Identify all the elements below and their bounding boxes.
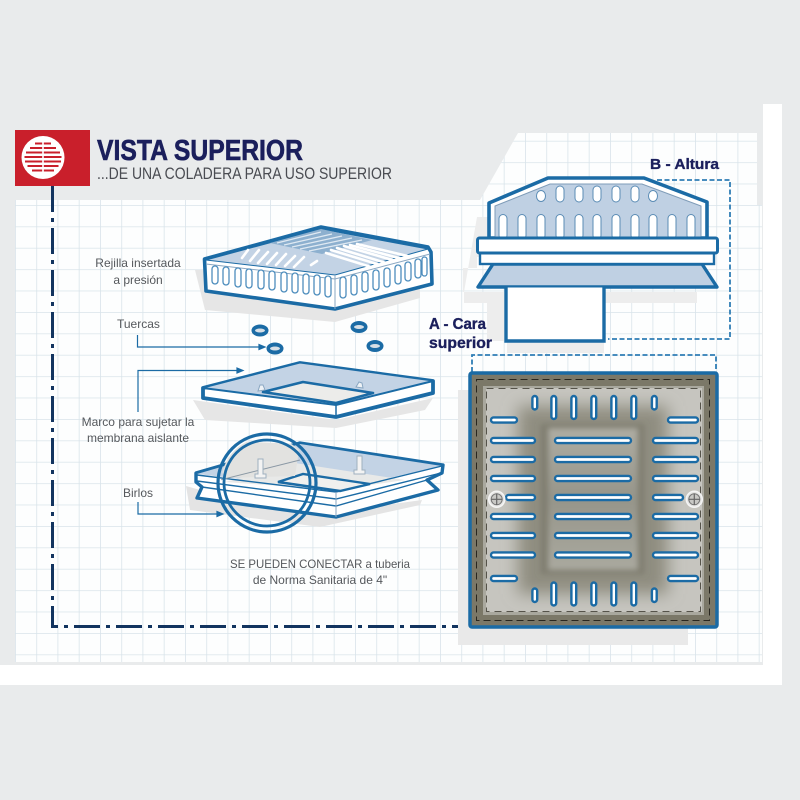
logo: red square with strainer bbox=[15, 130, 90, 186]
dash-dot connector line bbox=[52, 186, 470, 626]
label: A - Cara superior: superior bbox=[429, 335, 492, 352]
side view: height bbox=[463, 178, 718, 353]
label: marco: membrana aislante bbox=[87, 431, 189, 445]
title: VISTA SUPERIOR bbox=[97, 135, 303, 167]
connection note: SE PUEDEN CONECTAR a tuberia bbox=[230, 557, 410, 571]
dashed dimension: height bbox=[608, 180, 730, 339]
label: B - Altura: B - Altura bbox=[650, 156, 720, 173]
exploded part: base with magnified circle bbox=[186, 434, 443, 532]
label: tuercas: Tuercas bbox=[117, 317, 160, 331]
label: birlos: Birlos bbox=[123, 486, 153, 500]
dashed dimension: top face bbox=[472, 355, 716, 372]
icon: left screw bbox=[489, 491, 505, 507]
subtitle: ...DE UNA COLADERA PARA USO SUPERIOR bbox=[97, 165, 392, 183]
grid sheet bbox=[15, 133, 762, 662]
exploded part: nuts bbox=[252, 321, 384, 354]
arrow: marco bbox=[138, 368, 243, 412]
exploded part: press-fit grate bbox=[195, 227, 432, 322]
connection note: de Norma Sanitaria de 4" bbox=[253, 573, 387, 587]
exploded part: membrane frame bbox=[193, 363, 433, 428]
label: A - Cara superior: A - Cara bbox=[429, 316, 486, 333]
label: rejilla: Rejilla insertada bbox=[95, 256, 181, 270]
arrow: tuercas bbox=[138, 335, 265, 350]
icon: right screw bbox=[686, 491, 702, 507]
label: rejilla: a presión bbox=[113, 273, 163, 287]
arrow: birlos bbox=[138, 502, 223, 516]
top view: strainer plate bbox=[458, 373, 717, 645]
white paper band bbox=[0, 104, 782, 685]
label: marco: Marco para sujetar la bbox=[82, 415, 195, 429]
